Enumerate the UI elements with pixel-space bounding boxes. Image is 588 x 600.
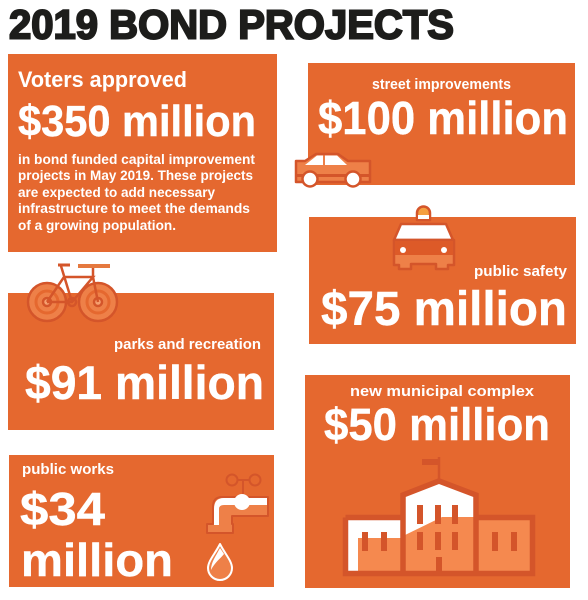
amount: 100 million: $100 million xyxy=(318,92,568,144)
description text xyxy=(18,151,255,233)
amount: 50 million: $50 million xyxy=(324,399,550,450)
amount: 350 million: $350 million xyxy=(18,97,256,146)
icon: faucet xyxy=(207,474,268,580)
description text: projects in May 2019. These projects xyxy=(18,167,253,183)
label: parks and recreation: parks and recreation xyxy=(114,336,261,353)
panel: new municipal complex xyxy=(305,375,570,588)
panel: street improvements xyxy=(308,63,575,185)
description text: infrastructure to meet the demands xyxy=(18,200,250,216)
icon: bicycle xyxy=(28,265,117,321)
amount: 34: $34 xyxy=(20,483,105,535)
title: 2019 BOND PROJECTS xyxy=(9,2,454,48)
heading: voters approved: Voters approved xyxy=(18,67,187,92)
amount: million: million xyxy=(21,534,173,586)
panel: public works xyxy=(9,455,274,587)
panel: parks and recreation xyxy=(8,293,274,430)
label: street improvements: street improvements xyxy=(372,76,511,93)
panel: voters approved xyxy=(8,54,277,252)
icon: car xyxy=(296,154,370,186)
label: public works: public works xyxy=(22,461,114,478)
description text: of a growing population. xyxy=(18,217,176,233)
label: public safety: public safety xyxy=(474,263,568,280)
panel: public safety xyxy=(309,217,576,344)
icon: municipal building xyxy=(346,457,533,574)
amount: 91 million: $91 million xyxy=(25,356,264,409)
amount: 75 million: $75 million xyxy=(321,283,567,336)
description text: are expected to add necessary xyxy=(18,184,215,200)
label: new municipal complex: new municipal complex xyxy=(350,383,535,400)
description text: in bond funded capital improvement xyxy=(18,151,255,167)
icon: police car xyxy=(394,207,454,269)
